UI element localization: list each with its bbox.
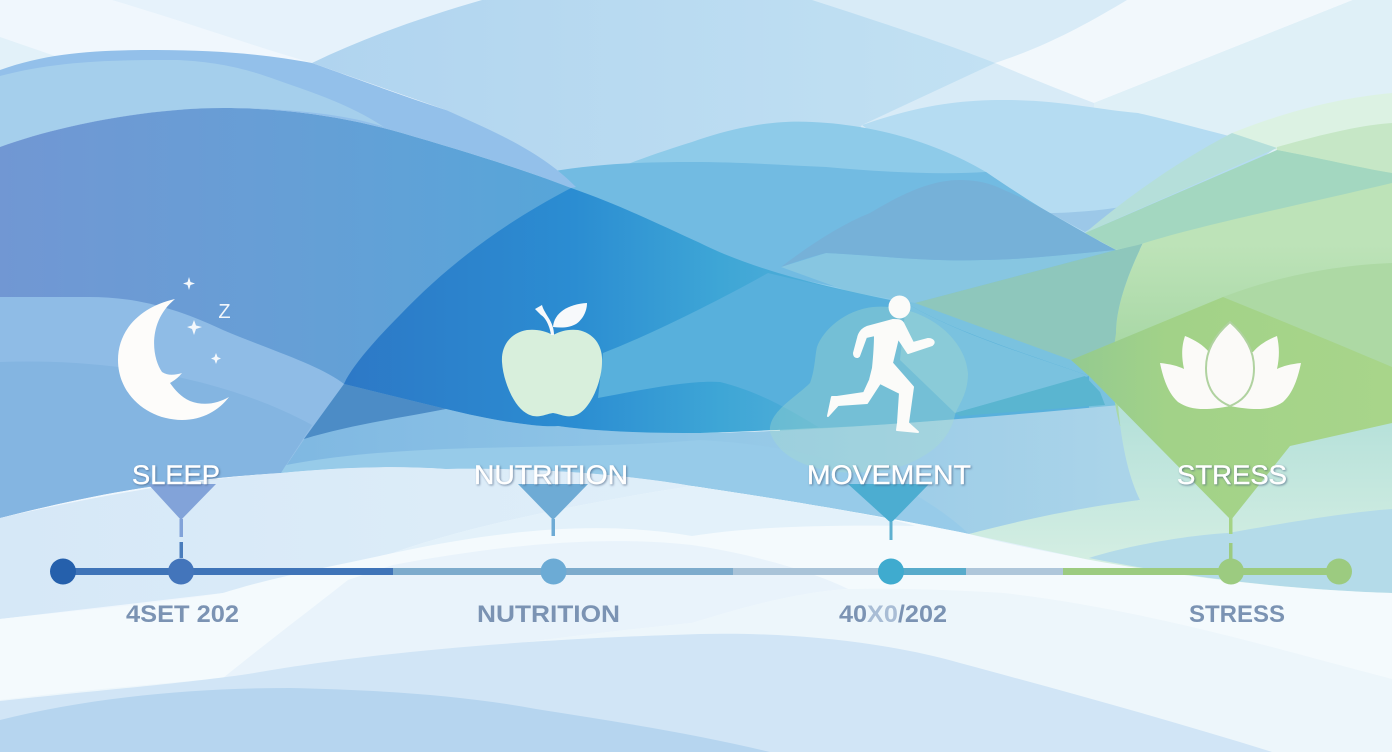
timeline [50, 558, 1352, 584]
timeline segment: light [966, 568, 1063, 575]
funnel: movement [848, 484, 929, 540]
timeline segment: sleep [63, 568, 393, 575]
icon: apple [502, 303, 602, 416]
funnel: stress [1071, 297, 1392, 559]
label: 40X0/202: 40X0/202 [839, 601, 947, 628]
sleep node [168, 558, 194, 584]
icon: apple stem [535, 305, 554, 335]
stress node [1218, 558, 1244, 584]
icon: stars [183, 277, 221, 364]
label: NUTRITION: NUTRITION [477, 601, 620, 628]
heading: NUTRITION: NUTRITION [474, 460, 628, 490]
icon: apple leaf [553, 303, 587, 328]
timeline segment: stress [1063, 568, 1340, 575]
icon backdrop: movement blob [770, 307, 968, 473]
icon: lotus [1160, 322, 1301, 409]
heading: STRESS: STRESS [1177, 460, 1287, 490]
heading: MOVEMENT: MOVEMENT [807, 460, 971, 490]
timeline end node [1326, 558, 1352, 584]
icon: runner [828, 296, 934, 432]
heading: SLEEP: SLEEP [132, 460, 220, 490]
timeline segment: movement [733, 568, 966, 575]
timeline segment: nutrition [393, 568, 733, 575]
label: STRESS: STRESS [1189, 601, 1285, 628]
funnel: sleep [148, 484, 216, 558]
icon: crescent moon with stars [118, 277, 231, 420]
timeline start node [50, 558, 76, 584]
icon: z letter: Z [218, 301, 231, 323]
movement node [878, 558, 904, 584]
label: 4SET 202: 4SET 202 [126, 601, 239, 628]
timeline segment: movement active [891, 568, 966, 575]
funnel: nutrition [518, 484, 588, 536]
nutrition node [540, 558, 566, 584]
